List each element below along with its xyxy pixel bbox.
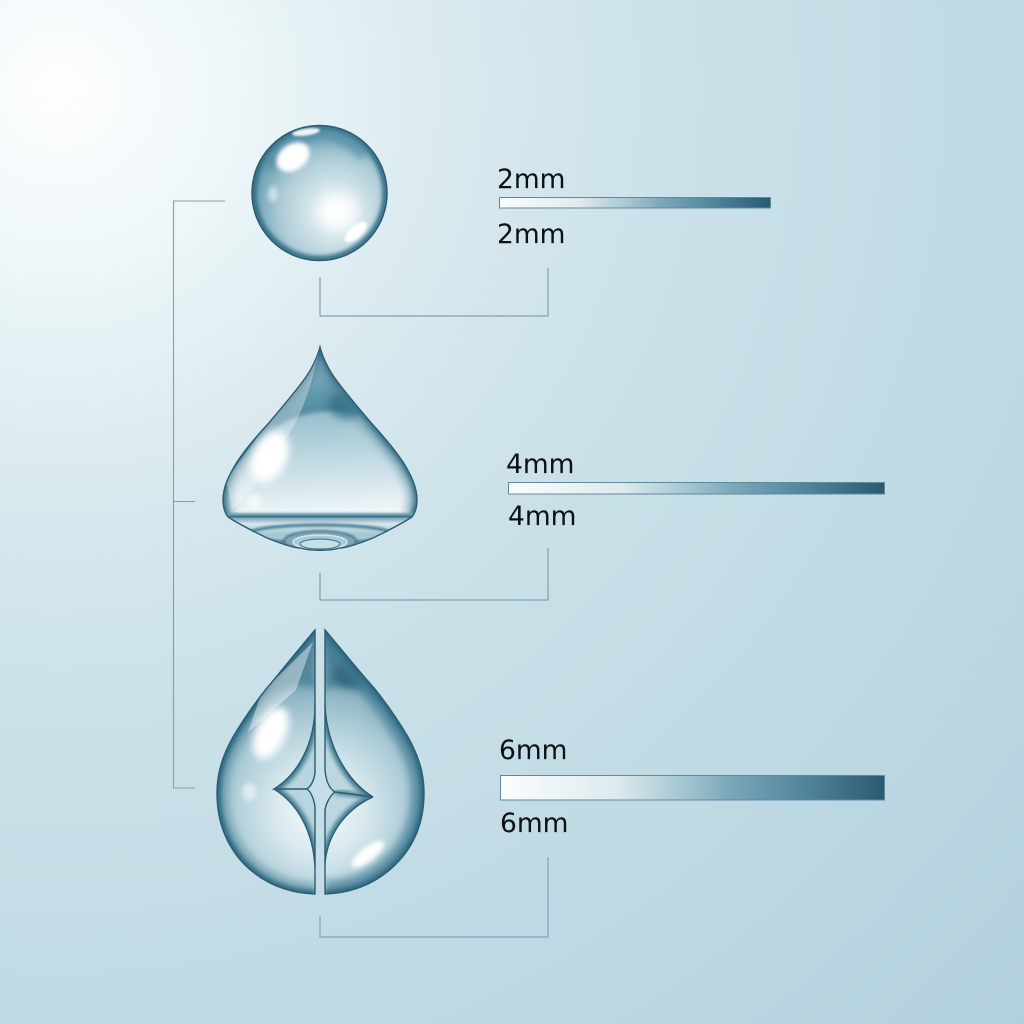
left half of split drop [217, 630, 315, 894]
size label: 6mm bottom: 6mm [500, 808, 568, 839]
size label: 2mm top: 2mm [497, 164, 566, 195]
size label: 6mm top: 6mm [499, 735, 568, 766]
drop 2: pointed drop with flat base [223, 345, 417, 551]
left bracket connecting the three drops [174, 201, 225, 788]
size bar: 6mm [500, 776, 884, 800]
size label: 4mm bottom: 4mm [508, 501, 576, 532]
size label: 4mm top: 4mm [506, 449, 574, 480]
drop 3: split drop with star facets [217, 630, 424, 894]
connector under drop 3 [320, 857, 548, 937]
connector under drop 2 [320, 548, 548, 600]
drop 1: sphere [252, 125, 388, 261]
size bar: 2mm [500, 198, 770, 208]
size bar: 4mm [508, 482, 884, 494]
right half of split drop [325, 630, 424, 894]
size label: 2mm bottom: 2mm [497, 219, 566, 250]
connector under drop 1 [320, 268, 548, 316]
